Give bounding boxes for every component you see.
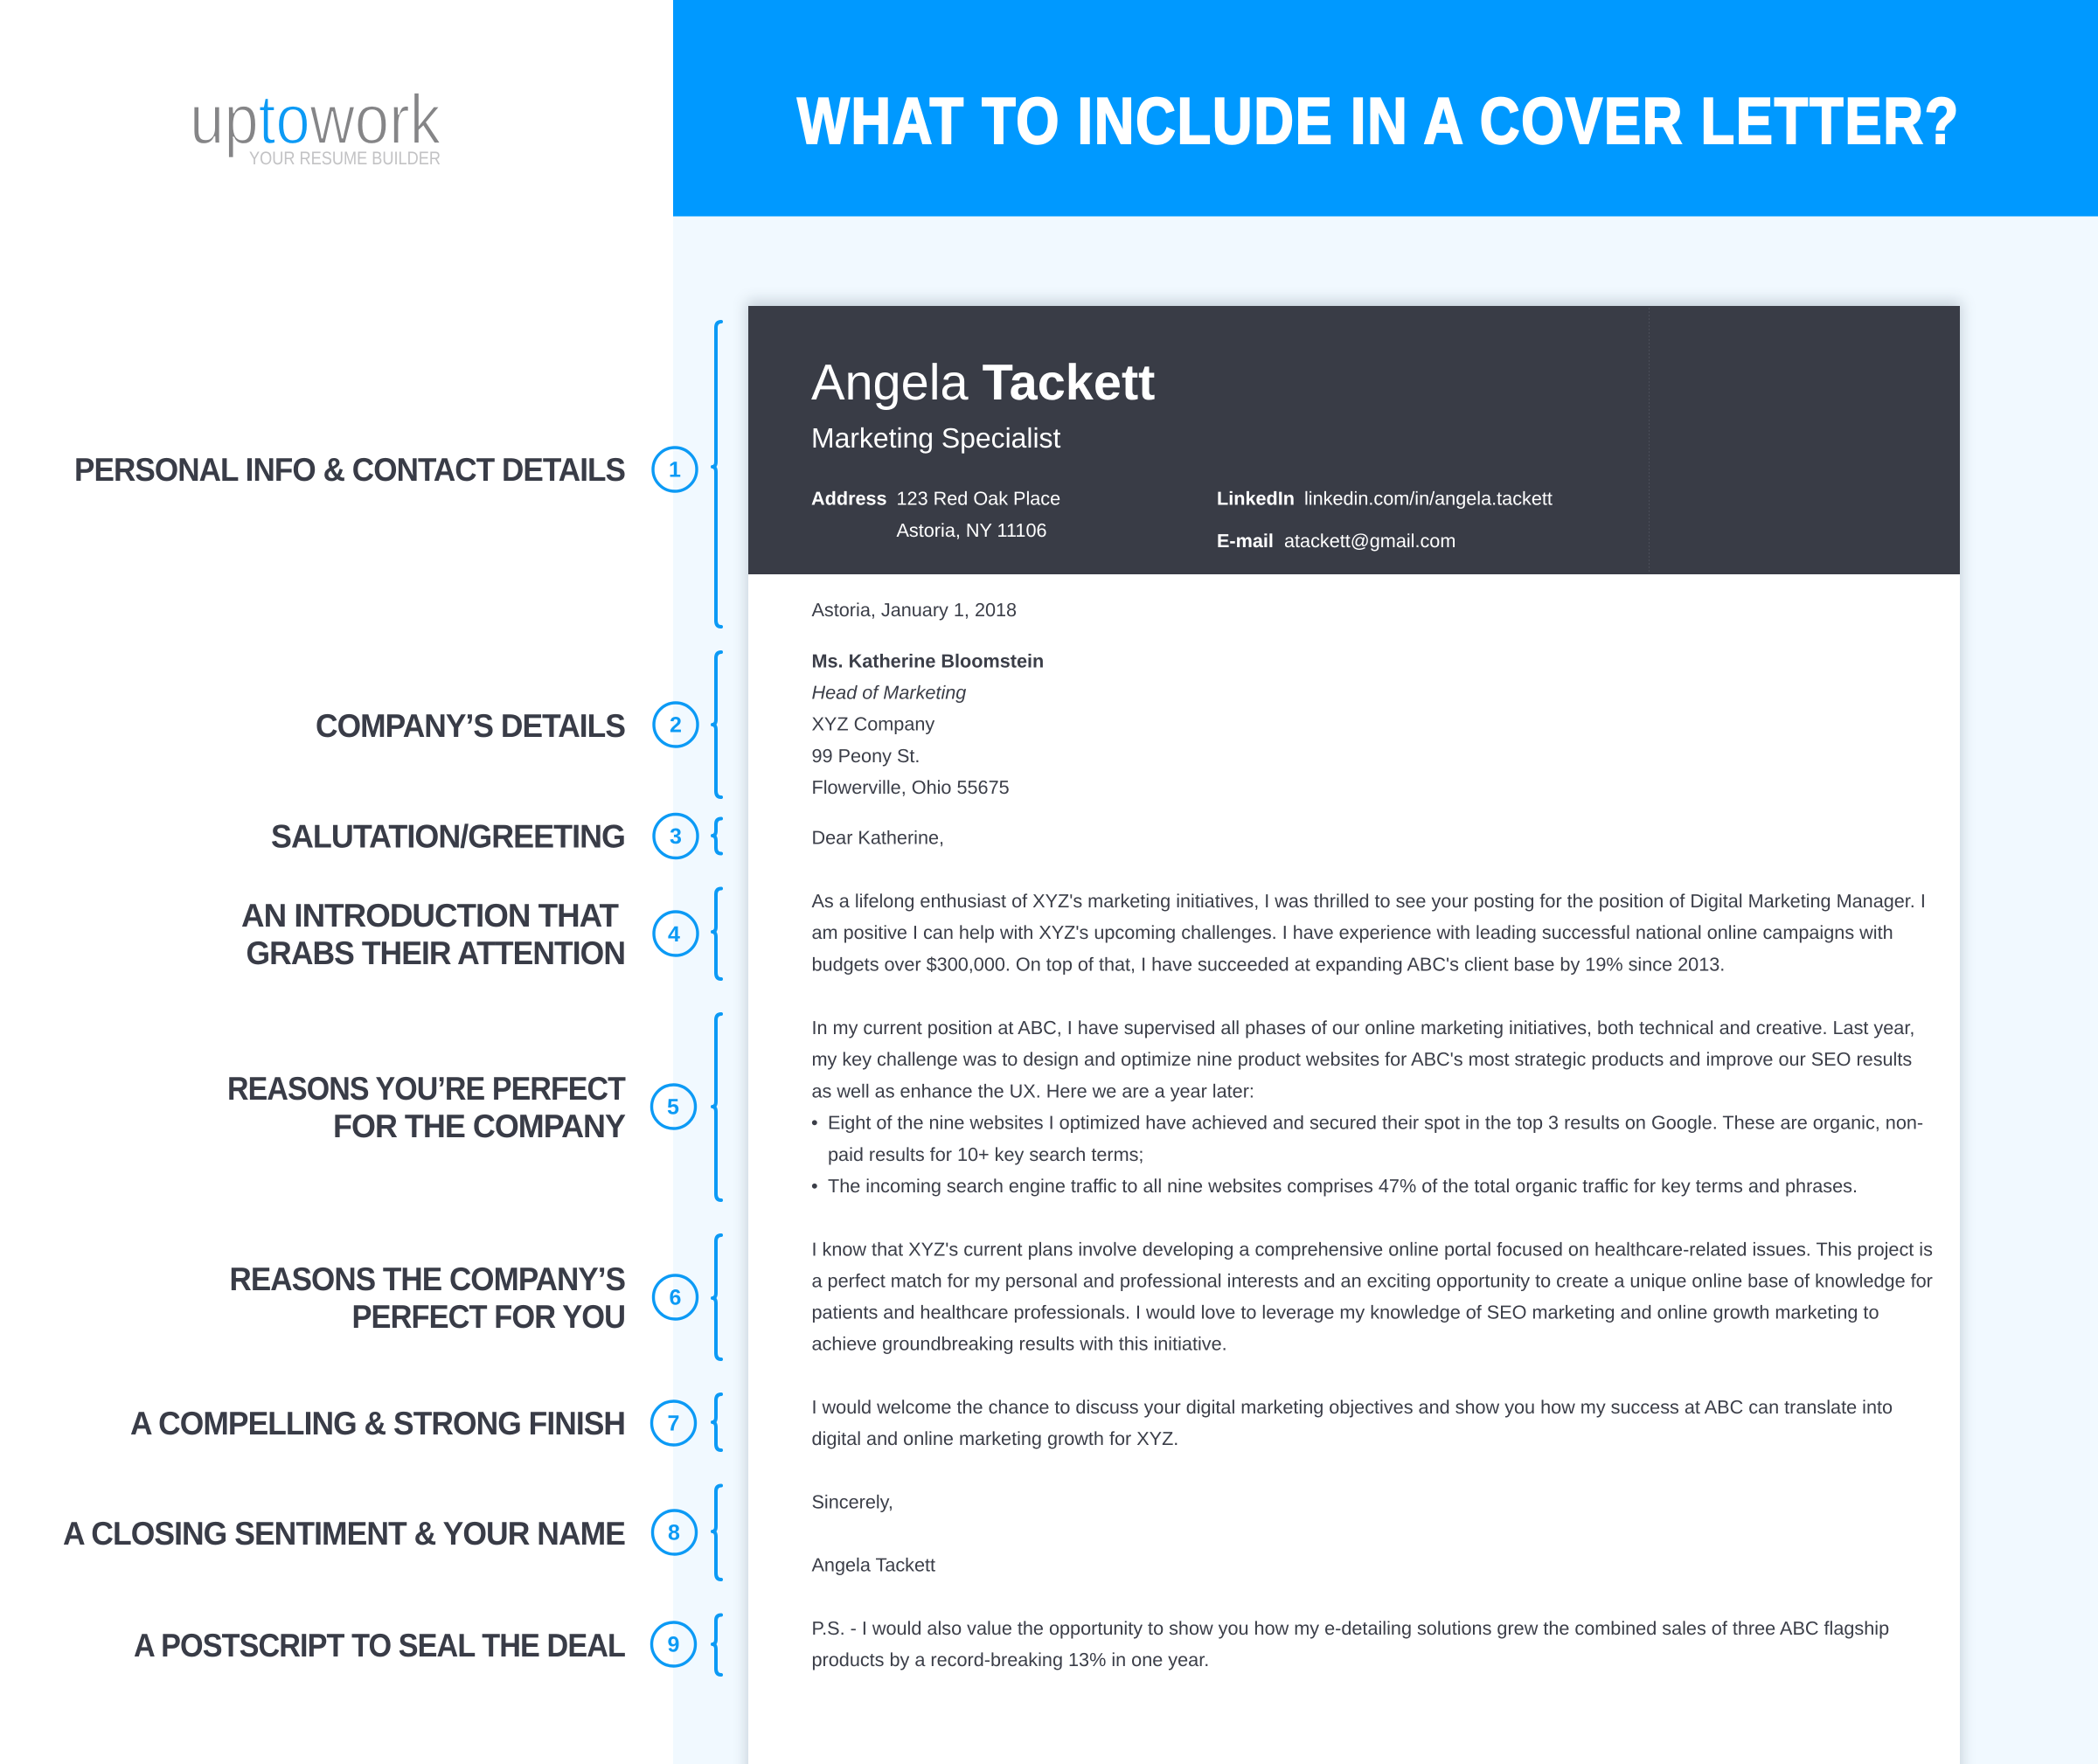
reasons you are perfect paragraph: paid results for 10+ key search terms; xyxy=(828,1143,1143,1165)
annotation 5: reasons you are perfect: FOR THE COMPANY xyxy=(333,1108,626,1144)
annotation 6: reasons company is perfect: REASONS THE COMPANY’S xyxy=(229,1260,625,1297)
address: 123 Red Oak Place xyxy=(897,488,1060,509)
sign-off: Angela Tackett xyxy=(811,1554,935,1576)
annotation 1: personal info xyxy=(74,322,721,627)
linkedin: linkedin.com/in/angela.tackett xyxy=(1304,488,1553,509)
annotation 3: salutation: SALUTATION/GREETING xyxy=(271,818,625,855)
address xyxy=(811,488,1060,541)
reasons the company is perfect paragraph: achieve groundbreaking results with this initiative. xyxy=(811,1333,1227,1355)
panel: light blue page background xyxy=(673,216,2098,1764)
annotation 4: introduction: AN INTRODUCTION THAT xyxy=(241,897,619,934)
recipient block xyxy=(811,649,1044,798)
closing paragraph xyxy=(811,1396,1893,1449)
reasons you are perfect paragraph: • xyxy=(811,1112,818,1134)
job title: Marketing Specialist xyxy=(811,422,1061,454)
annotation 3: salutation xyxy=(271,815,721,858)
recipient block: Flowerville, Ohio 55675 xyxy=(811,776,1010,798)
annotation 8: closing sentiment: 8 xyxy=(668,1521,680,1545)
postscript xyxy=(811,1617,1889,1670)
annotation 7: strong finish: 7 xyxy=(668,1411,679,1435)
annotation 5: reasons you are perfect: REASONS YOU’RE PERFECT xyxy=(227,1070,626,1107)
annotation 6: reasons company is perfect: 6 xyxy=(670,1285,681,1309)
annotation 9: postscript: 9 xyxy=(668,1633,679,1657)
recipient block: Head of Marketing xyxy=(811,682,966,703)
postscript: P.S. - I would also value the opportunity to show you how my e-detailing solutions grew the combined sales of three ABC flagship xyxy=(811,1617,1889,1639)
annotation 4: introduction: 4 xyxy=(668,922,680,947)
annotation 2: company details: 2 xyxy=(670,713,682,738)
greeting: Dear Katherine, xyxy=(811,827,944,849)
reasons the company is perfect paragraph: patients and healthcare professionals. I would love to leverage my knowledge of SEO marketing and online growth marketing to xyxy=(811,1301,1879,1323)
recipient block: 99 Peony St. xyxy=(811,745,920,767)
annotation 8: closing sentiment xyxy=(63,1486,721,1580)
annotation 4: introduction: GRABS THEIR ATTENTION xyxy=(247,934,625,971)
logo: uptowork: uptowork xyxy=(190,80,441,158)
annotation 7: strong finish xyxy=(130,1394,721,1450)
introduction paragraph: am positive I can help with XYZ's upcoming challenges. I have experience with leading successful national online campaigns with xyxy=(811,921,1893,943)
annotation 5: reasons you are perfect: 5 xyxy=(667,1094,679,1119)
annotation 1: personal info: 1 xyxy=(669,458,681,483)
header band xyxy=(673,0,2098,217)
reasons the company is perfect paragraph xyxy=(811,1238,1933,1355)
annotation 8: closing sentiment: A CLOSING SENTIMENT & YOUR NAME xyxy=(63,1515,625,1552)
annotation 3: salutation: 3 xyxy=(670,824,682,849)
introduction paragraph: As a lifelong enthusiast of XYZ's marketing initiatives, I was thrilled to see your posting for the position of Digital Marketing Manager. I xyxy=(811,890,1926,912)
reasons you are perfect paragraph: Eight of the nine websites I optimized have achieved and secured their spot in the top 3 results on Google. These are organic, non- xyxy=(828,1112,1923,1134)
introduction paragraph xyxy=(811,890,1926,975)
annotation 6: reasons company is perfect xyxy=(229,1235,721,1359)
reasons you are perfect paragraph xyxy=(811,1017,1923,1197)
annotation 4: introduction xyxy=(241,888,721,979)
letter date: Astoria, January 1, 2018 xyxy=(811,599,1017,621)
panel: resume header block xyxy=(748,306,1960,574)
annotation 2: company details: COMPANY’S DETAILS xyxy=(316,707,625,744)
sign-off: Sincerely, xyxy=(811,1490,893,1512)
introduction paragraph: budgets over $300,000. On top of that, I have succeeded at expanding ABC's client base by 19% since 2013. xyxy=(811,953,1725,975)
annotation 6: reasons company is perfect: PERFECT FOR YOU xyxy=(351,1298,625,1335)
recipient block: Ms. Katherine Bloomstein xyxy=(811,649,1044,671)
logo: uptowork: YOUR RESUME BUILDER xyxy=(249,149,441,169)
address: Address xyxy=(811,488,887,509)
annotation 9: postscript: A POSTSCRIPT TO SEAL THE DEAL xyxy=(134,1627,625,1663)
postscript: products by a record-breaking 13% in one year. xyxy=(811,1649,1209,1670)
annotation 9: postscript xyxy=(134,1615,721,1675)
reasons you are perfect paragraph: my key challenge was to design and optimize nine product websites for ABC's most strategic products and improve our SEO results xyxy=(811,1048,1912,1070)
applicant name: Angela Tackett xyxy=(811,355,1155,411)
closing paragraph: I would welcome the chance to discuss your digital marketing objectives and show you how my success at ABC can translate into xyxy=(811,1396,1893,1418)
address: Astoria, NY 11106 xyxy=(897,519,1047,541)
paper shadow xyxy=(747,301,1962,1764)
panel: cover letter paper xyxy=(748,306,1960,1764)
annotation 1: personal info: PERSONAL INFO & CONTACT DETAILS xyxy=(74,451,625,488)
reasons the company is perfect paragraph: a perfect match for my personal and professional interests and an exciting opportunity to create a unique online base of knowledge for xyxy=(811,1269,1933,1291)
recipient block: XYZ Company xyxy=(811,713,934,735)
annotation 2: company details xyxy=(316,652,721,797)
reasons the company is perfect paragraph: I know that XYZ's current plans involve developing a comprehensive online portal focused on healthcare-related issues. This project is xyxy=(811,1238,1933,1260)
reasons you are perfect paragraph: • xyxy=(811,1175,818,1197)
reasons you are perfect paragraph: as well as enhance the UX. Here we are a year later: xyxy=(811,1080,1254,1101)
closing paragraph: digital and online marketing growth for XYZ. xyxy=(811,1427,1178,1449)
email: E-mail xyxy=(1217,530,1274,552)
email: atackett@gmail.com xyxy=(1284,530,1455,552)
annotation 5: reasons you are perfect xyxy=(227,1014,721,1200)
linkedin: LinkedIn xyxy=(1217,488,1295,509)
sign-off xyxy=(811,1490,935,1576)
reasons you are perfect paragraph: The incoming search engine traffic to all nine websites comprises 47% of the total organic traffic for key terms and phrases. xyxy=(828,1175,1858,1197)
reasons you are perfect paragraph: In my current position at ABC, I have supervised all phases of our online marketing initiatives, both technical and creative. Last year, xyxy=(811,1017,1914,1038)
annotation 7: strong finish: A COMPELLING & STRONG FINISH xyxy=(130,1405,625,1441)
